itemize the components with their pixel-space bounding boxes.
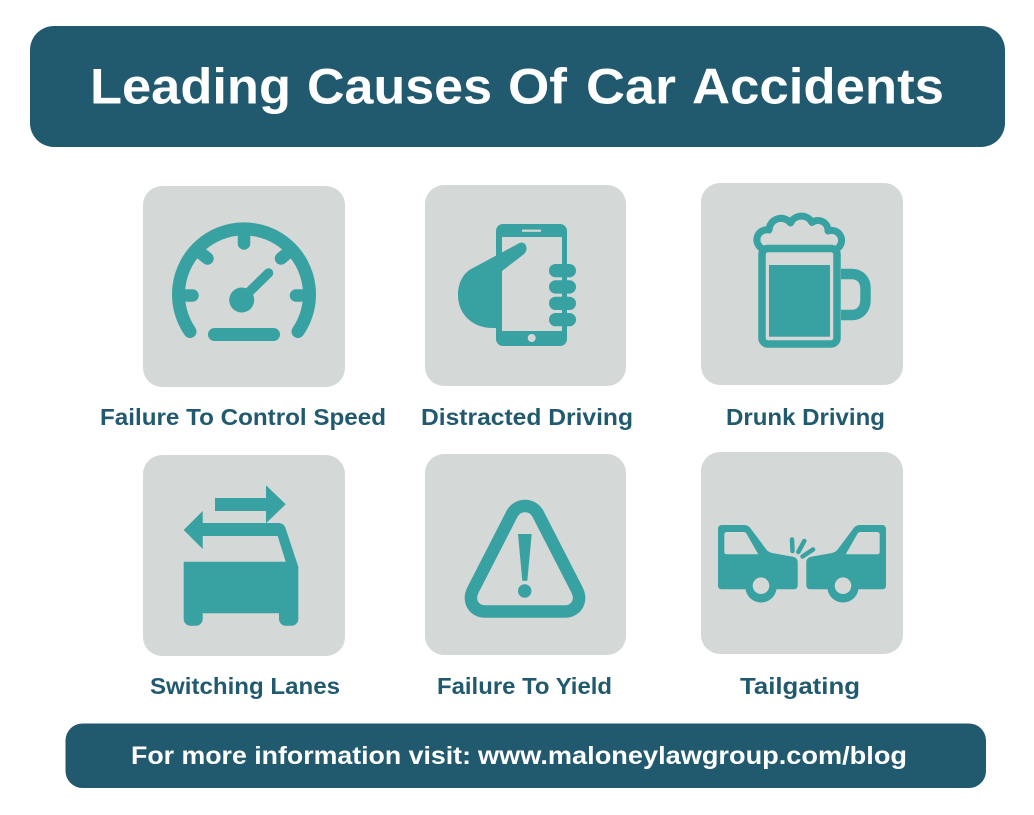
footer link text: www.maloneylawgroup.com/blog (477, 742, 907, 770)
icon: colliding cars (718, 525, 886, 603)
footer banner (66, 724, 986, 788)
panel: failure to yield (425, 454, 626, 699)
label: Tailgating (740, 673, 860, 699)
label: Distracted Driving (421, 404, 633, 430)
label: Failure To Yield (437, 673, 612, 699)
panel: failure to control speed (100, 186, 386, 430)
label: Failure To Control Speed (100, 404, 386, 430)
title: Of (508, 58, 567, 114)
panel: tailgating (701, 452, 903, 699)
icon: hand holding phone (458, 224, 576, 346)
icon: car changing lanes (184, 485, 298, 626)
title (90, 58, 944, 114)
header banner (30, 26, 1005, 147)
icon: warning triangle (471, 506, 579, 612)
footer link text (131, 742, 907, 770)
title: Accidents (692, 58, 944, 114)
icon: beer mug (757, 216, 866, 344)
title: Causes (307, 58, 492, 114)
footer link text: For more information visit: (131, 742, 471, 770)
label: Drunk Driving (726, 404, 885, 430)
label: Switching Lanes (150, 673, 340, 699)
panel: distracted driving (421, 185, 633, 430)
title: Car (586, 58, 676, 114)
title: Leading (90, 58, 291, 114)
panel: drunk driving (701, 183, 903, 430)
icon: speedometer (178, 229, 310, 341)
panel: switching lanes (143, 455, 345, 699)
